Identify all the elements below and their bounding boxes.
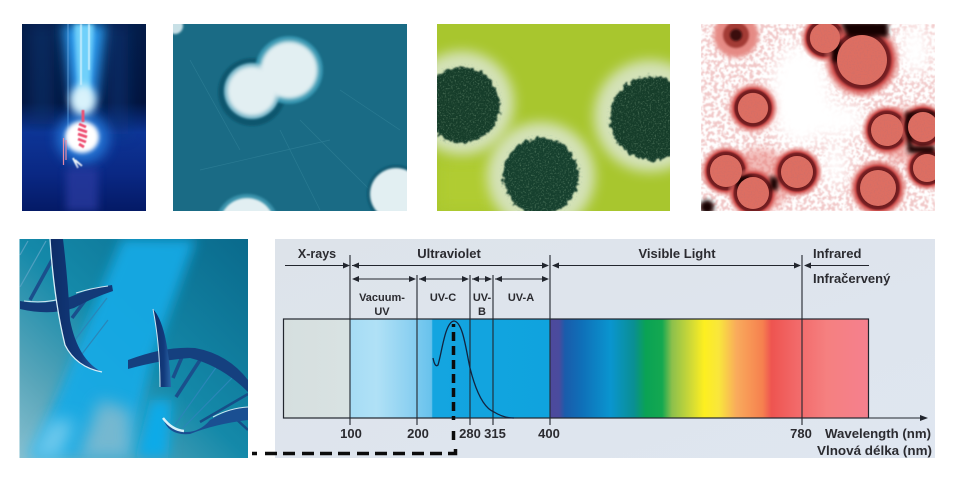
axis numbers: 780 [790, 426, 812, 441]
axis numbers [340, 426, 812, 441]
axis numbers: 280 [459, 426, 481, 441]
rungs [20, 241, 248, 430]
region labels: Vacuum- [359, 292, 405, 304]
photo: pale bacterial colonies on teal [173, 24, 407, 211]
left helix strand [20, 285, 113, 312]
panel background [275, 239, 935, 458]
axis numbers: 400 [538, 426, 560, 441]
region labels: B [478, 306, 486, 318]
photo: DNA double helix in blue light [20, 239, 248, 458]
photo: glowing flame [22, 24, 146, 211]
axis title: Vlnová délka (nm) [817, 444, 932, 458]
dashed connector from DNA photo to 260 nm peak [252, 324, 456, 454]
photo: dark green mould colonies [437, 24, 670, 211]
infrared labels: Infračervený [813, 271, 891, 286]
wavelength tick lines [350, 255, 802, 425]
region labels: UV-A [508, 292, 534, 304]
axis numbers: 200 [407, 426, 429, 441]
axis title: Wavelength (nm) [825, 427, 931, 441]
axis numbers: 315 [484, 426, 506, 441]
region labels: Visible Light [638, 246, 716, 261]
photo: red virus particles [701, 24, 935, 211]
region labels: Ultraviolet [417, 246, 481, 261]
region labels: UV- [473, 292, 492, 304]
region labels: UV-C [430, 292, 456, 304]
range arrows [285, 262, 928, 421]
region labels [298, 246, 716, 318]
panel: electromagnetic spectrum chart [275, 239, 935, 458]
infrared labels [813, 246, 891, 286]
axis numbers: 100 [340, 426, 362, 441]
axis title [817, 427, 932, 458]
spectrum bar [284, 319, 868, 418]
infrared labels: Infrared [813, 246, 861, 261]
right helix strand [128, 348, 248, 392]
region labels: X-rays [298, 247, 336, 261]
DNA absorption curve [433, 321, 514, 418]
region labels: UV [374, 306, 390, 318]
